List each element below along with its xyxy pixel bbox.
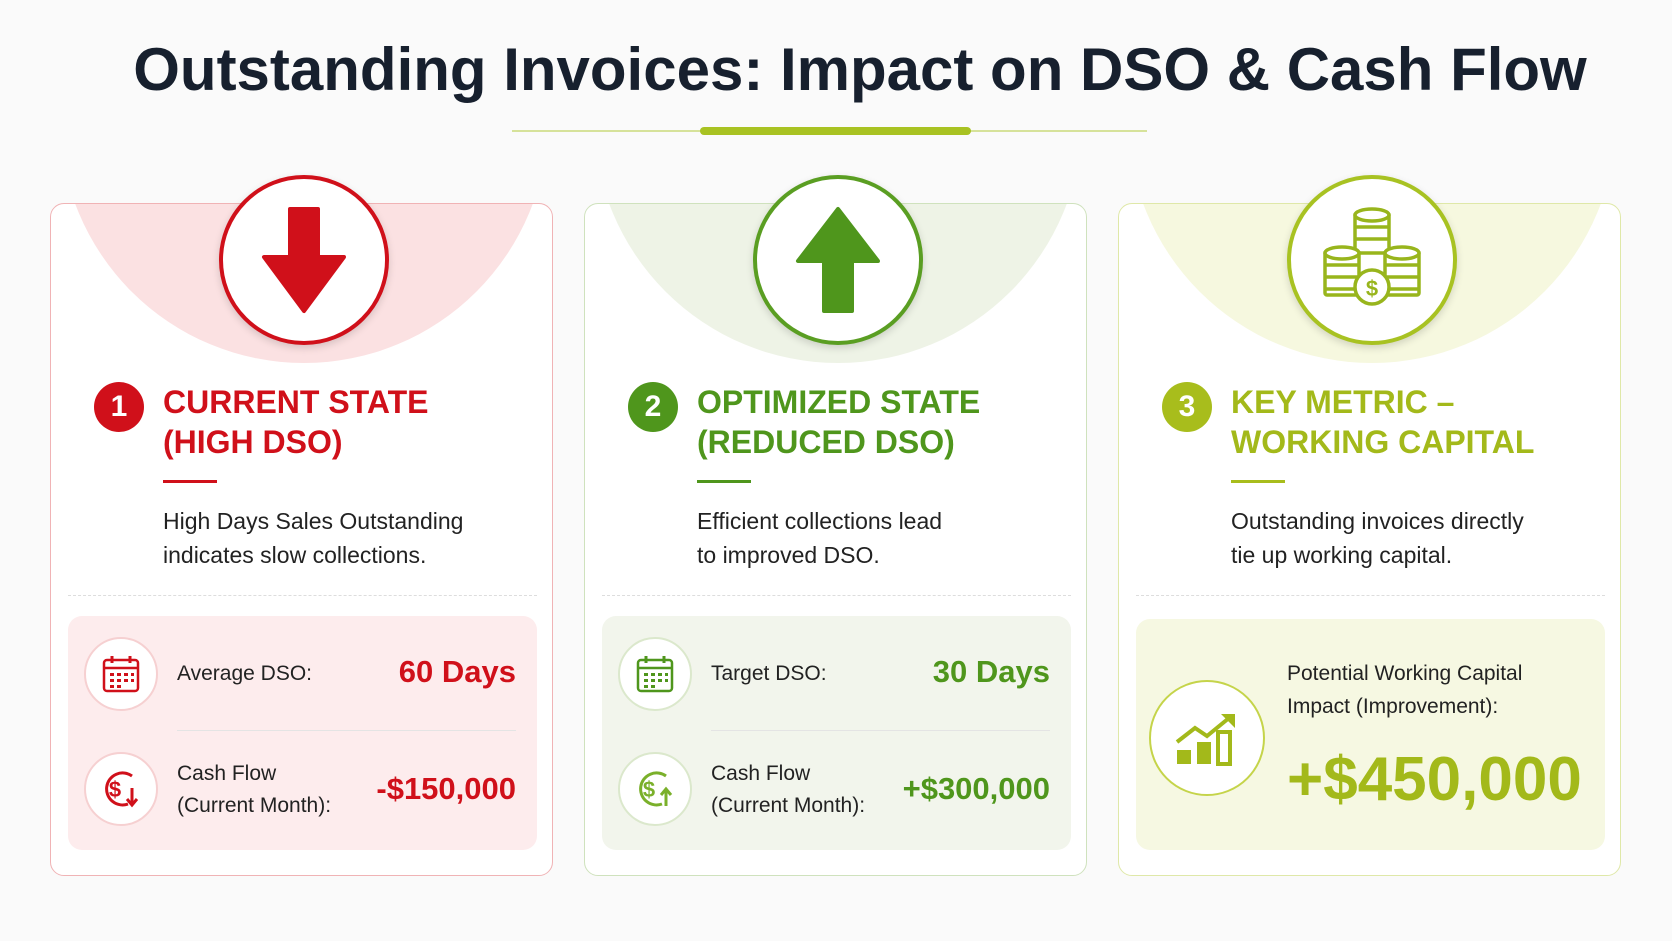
description [1231,508,1524,568]
heading [697,384,980,460]
heading [163,384,428,460]
icon: up arrow [753,175,923,345]
panel: optimized state [584,203,1087,876]
metrics box: 60 Days [399,654,516,689]
panel: current state [50,203,553,876]
description [697,508,942,568]
metrics box: Target DSO: [711,662,827,685]
metrics box: (Current Month): [711,794,865,817]
description: indicates slow collections. [163,542,426,568]
icon: cash up [618,752,692,826]
metrics box: +$300,000 [903,771,1050,806]
badge 3 [1162,382,1212,432]
metric box: Impact (Improvement): [1287,695,1498,718]
metrics box: Average DSO: [177,662,312,685]
icon: cash down [84,752,158,826]
badge 1: 1 [111,390,127,423]
heading: CURRENT STATE [163,384,428,420]
icon: cash up: $ [643,777,655,802]
heading: (REDUCED DSO) [697,424,955,460]
metrics box: Cash Flow [177,762,276,785]
heading: KEY METRIC – [1231,384,1454,420]
description [163,508,463,568]
metrics box: Cash Flow [711,762,810,785]
metrics box: -$150,000 [376,771,516,806]
icon: down arrow [219,175,389,345]
icon: coins: $ [1366,276,1378,301]
description: to improved DSO. [697,542,880,568]
title: Outstanding Invoices: Impact on DSO & Cash Flow [133,36,1587,103]
metrics box: (Current Month): [177,794,331,817]
metrics box: 30 Days [933,654,1050,689]
metric box: Potential Working Capital [1287,662,1522,685]
heading [1231,384,1534,460]
description: Efficient collections lead [697,508,942,534]
metrics box [68,616,537,850]
icon: calendar [84,637,158,711]
heading: (HIGH DSO) [163,424,343,460]
badge 3: 3 [1179,390,1195,423]
badge 2 [628,382,678,432]
metric box [1136,619,1605,850]
heading: OPTIMIZED STATE [697,384,980,420]
icon: growth chart [1149,680,1265,796]
metric box: +$450,000 [1287,745,1582,814]
description: tie up working capital. [1231,542,1452,568]
badge 1 [94,382,144,432]
icon: calendar [618,637,692,711]
badge 2: 2 [645,390,661,423]
metrics box [602,616,1071,850]
heading: WORKING CAPITAL [1231,424,1534,460]
icon: cash down: $ [109,777,121,802]
description: Outstanding invoices directly [1231,508,1524,534]
description: High Days Sales Outstanding [163,508,463,534]
icon: coins [1287,175,1457,345]
panel: working capital [1118,203,1621,876]
